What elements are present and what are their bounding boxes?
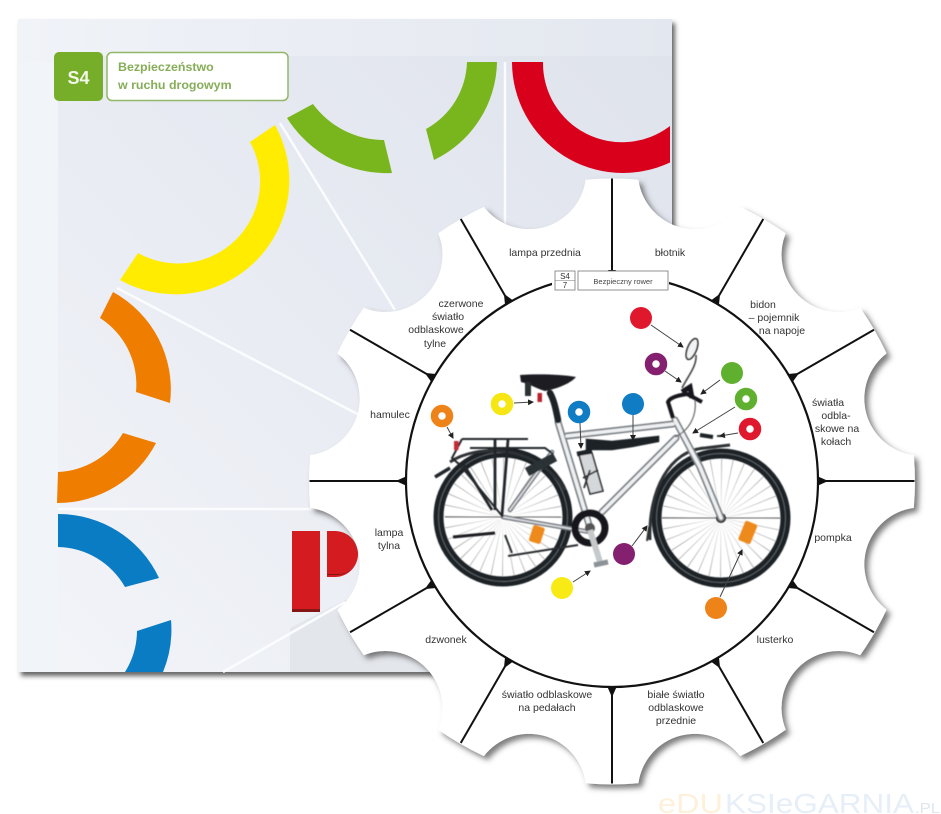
card heading tag [552,271,669,290]
bicycle [435,337,786,582]
section badge: S4: S4 [67,68,90,88]
orange spoke reflectors [529,520,758,545]
arc: red [512,62,670,173]
label: lampa tylna: lampa [375,527,403,539]
background panel [18,19,672,672]
frame [503,393,721,532]
watermark [658,788,940,814]
label: lampa tylna: tylna [378,540,400,552]
label: lampa tylna [375,527,403,552]
section title: Bezpieczeństwo [118,60,214,74]
label: światła odblaskowe na kołach: światła [812,397,844,409]
lock on frame [527,457,555,472]
label: czerwone światło odblaskowe tylne: światło [432,311,464,323]
marker: blue ring [572,404,586,420]
label: białe światło odblaskowe przednie: przednie [656,715,696,727]
white guide lines [58,62,505,672]
arc: orange upper [100,292,171,403]
rear red light [454,441,458,450]
chainring and crank [575,513,608,565]
label: światło odblaskowe na pedałach: światło odblaskowe [502,689,592,701]
label: światła odblaskowe na kołach: odbla- [821,410,851,422]
bottle [577,451,603,494]
marker: orange ring [434,408,450,424]
rear rack [435,439,553,517]
wheel inner ring and dividers [310,178,914,784]
marker: yellow ring [494,396,510,412]
mudguards [450,445,730,540]
label: lampa przednia: lampa przednia [509,247,581,259]
arc: yellow [120,125,289,294]
label: białe światło odblaskowe przednie [647,689,705,727]
label: pompka: pompka [814,532,852,544]
logo: red P [292,531,358,612]
section title: w ruchu drogowym [117,78,232,92]
arc: blue upper [58,514,159,587]
marker: orange [705,597,727,619]
label: czerwone światło odblaskowe tylne [408,298,484,350]
label: dzwonek: dzwonek [425,634,467,646]
marker: purple [613,543,635,565]
label: czerwone światło odblaskowe tylne: tylne [424,338,446,350]
handlebar [668,387,702,437]
section title [107,52,288,100]
label: hamulec: hamulec [370,409,410,421]
card heading tag: S4 [560,272,570,281]
derailleur and chain [505,535,578,556]
arc: green left [287,104,392,173]
label: czerwone światło odblaskowe tylne: odblaskowe [408,324,464,336]
bag on top tube [587,437,658,449]
bell post [647,527,649,541]
arc: orange lower [57,433,156,503]
label: błotnik: błotnik [655,247,686,259]
label: białe światło odblaskowe przednie: białe światło [647,689,705,701]
label: światło odblaskowe na pedałach: na pedałach [518,702,576,714]
front wheel [656,454,786,582]
label: czerwone światło odblaskowe tylne: czerwone [439,298,484,310]
card heading tag: 7 [563,281,568,290]
section badge: S4 [54,52,103,101]
marker: red [630,307,652,329]
rear wheel [438,452,568,582]
arc: blue lower [125,620,171,672]
label: światła odblaskowe na kołach: kołach [821,436,851,448]
gear wheel disc [309,179,915,784]
seat red light [538,393,542,402]
saddle [520,374,576,396]
marker: green [721,362,743,384]
label: białe światło odblaskowe przednie: odblaskowe [648,702,704,714]
marker: green ring [738,392,754,406]
arc: green right [426,62,497,160]
label: bidon: – pojemnik [749,312,800,324]
label: bidon [749,299,805,337]
label: lusterko: lusterko [757,634,794,646]
marker: purple ring [648,356,664,372]
label: światło odblaskowe na pedałach [502,689,592,714]
label: światła odblaskowe na kołach [812,397,859,448]
mirror [682,337,700,388]
marker: blue [622,393,644,415]
label: bidon: na napoje [759,325,805,337]
label: światła odblaskowe na kołach: skowe na [815,423,859,435]
marker: yellow [551,577,573,599]
front lamp and pump [700,435,713,437]
marker: red ring [742,422,758,436]
card heading tag: Bezpieczny rower [593,277,653,286]
callout arrows [447,325,742,597]
label: bidon: bidon [750,299,776,311]
